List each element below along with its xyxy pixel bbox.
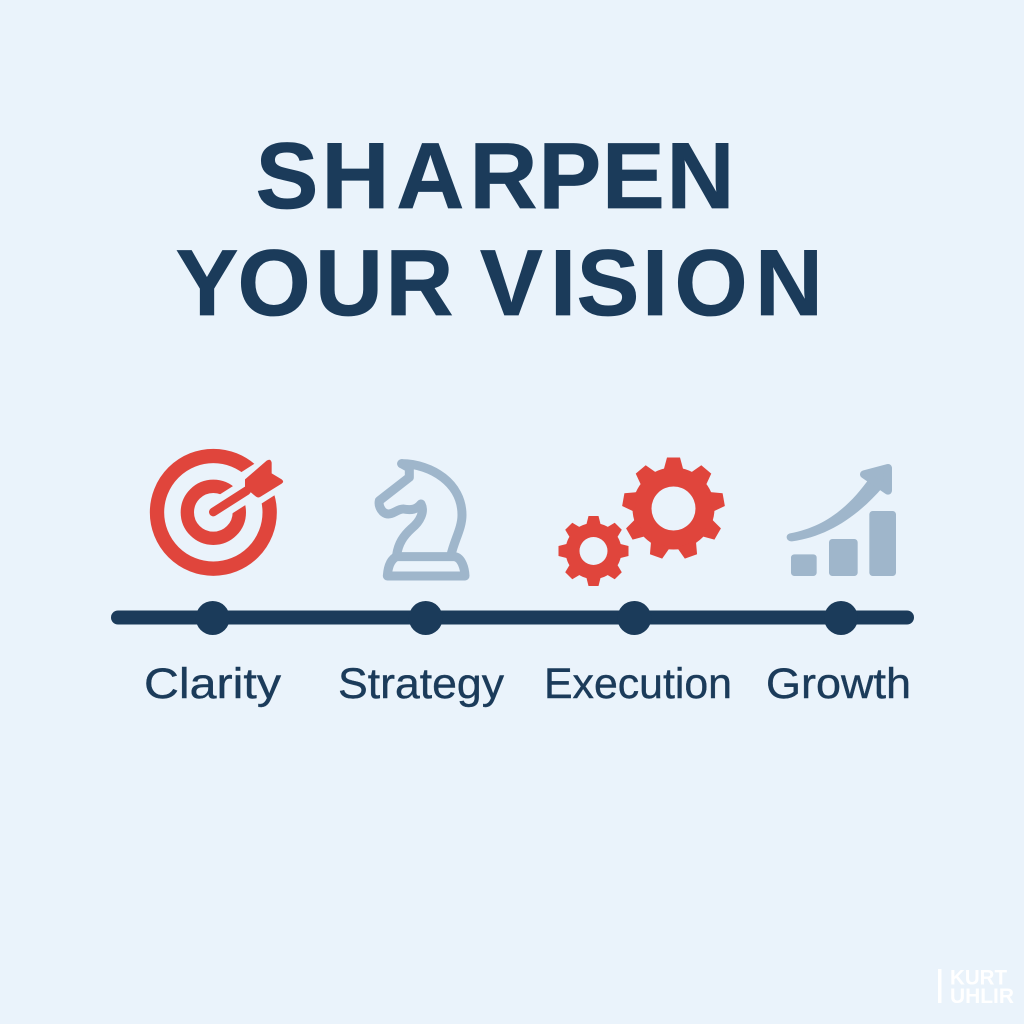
icon: growth chart [787, 468, 896, 576]
label: strategy: Strategy [338, 660, 505, 708]
icon: large gear [622, 458, 725, 560]
icon: chess knight [379, 464, 465, 576]
label: execution: Execution [544, 660, 732, 708]
watermark [938, 966, 1014, 1008]
label: clarity: Clarity [144, 660, 282, 708]
labels [144, 660, 911, 708]
title [176, 123, 823, 335]
title: SHARPEN [256, 123, 734, 228]
icon: small gear [558, 516, 628, 586]
watermark: UHLIR [950, 985, 1014, 1008]
timeline node: strategy [409, 601, 443, 635]
watermark: KURT [950, 966, 1007, 990]
icon: target with arrow [157, 456, 287, 569]
title: YOUR VISION [176, 230, 823, 335]
label: growth: Growth [766, 660, 911, 708]
timeline [111, 601, 914, 635]
timeline node: execution [617, 601, 651, 635]
timeline node: growth [824, 601, 858, 635]
icon: gears [558, 458, 725, 586]
timeline node: clarity [196, 601, 230, 635]
